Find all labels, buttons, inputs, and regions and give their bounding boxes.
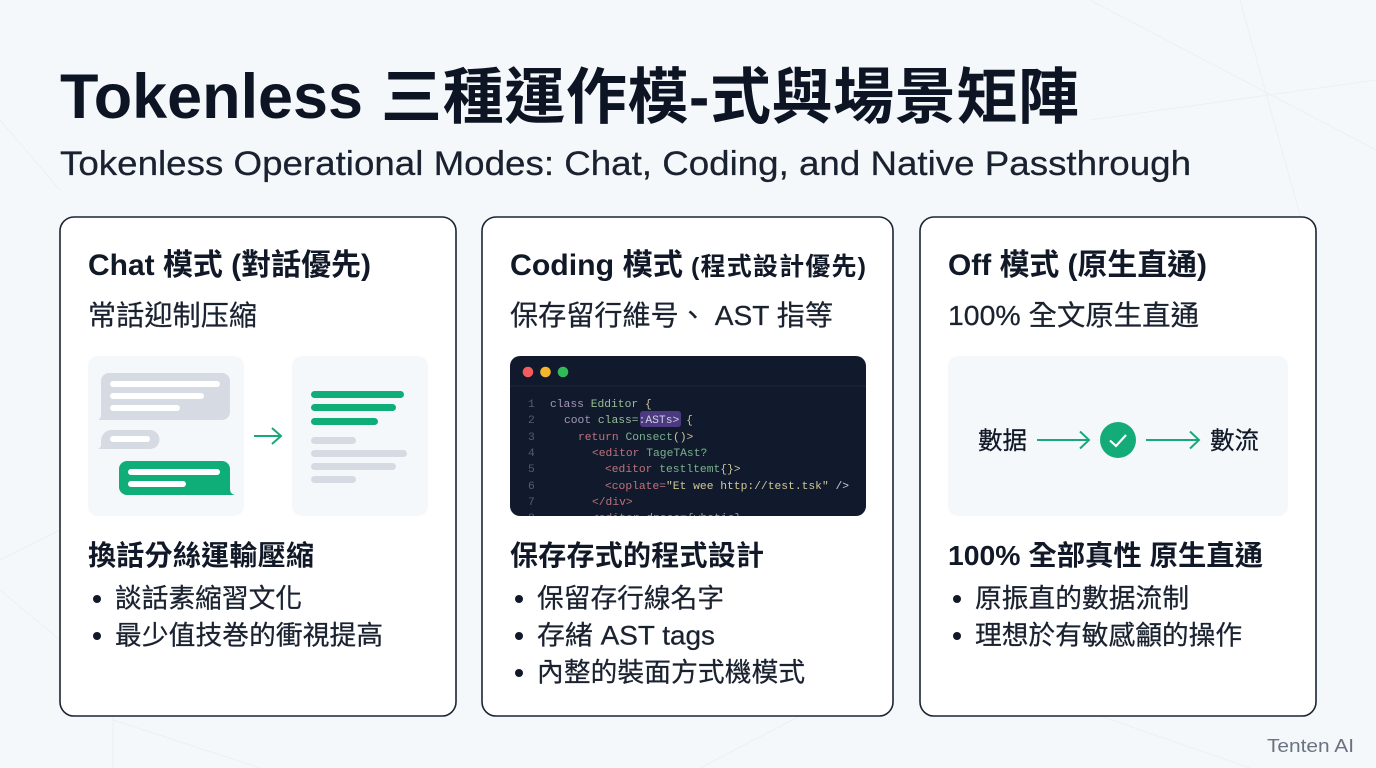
- coding subheading: 保存留行維号、 AST 指等: [510, 300, 833, 331]
- coding section title: 保存存式的程式設計: [510, 540, 764, 571]
- subtitle: Tokenless Operational Modes: Chat, Coding, and Native Passthrough: [60, 145, 1191, 183]
- illustration: code editor: <editor dpose={whatio}: [592, 513, 741, 525]
- illustration: code editor: 3: [528, 432, 535, 444]
- chat bullets: [93, 584, 383, 650]
- coding heading: [510, 249, 866, 282]
- illustration: code editor: return Consect()>: [578, 432, 693, 444]
- off bullets: [953, 584, 1242, 650]
- chat section title: 換話分絲運輸壓縮: [88, 540, 314, 571]
- chat subheading: 常話迎制压縮: [88, 300, 257, 331]
- coding bullets: [515, 584, 805, 688]
- illustration: code editor: 5: [528, 464, 535, 476]
- title: [60, 62, 1079, 132]
- illustration: code editor: <editor testltemt{}>: [605, 464, 741, 476]
- coding bullets: 存緒 AST tags: [537, 620, 715, 650]
- illustration: code editor: 1: [528, 399, 535, 411]
- illustration: chat compression: [88, 356, 428, 516]
- off bullets: 原振直的數据流制: [975, 584, 1189, 614]
- chat heading: Chat 模式 (對話優先): [88, 249, 371, 282]
- chat bullets: 談話素縮習文化: [115, 584, 302, 614]
- illustration: code editor: 8: [528, 513, 535, 525]
- panel: coding mode: [482, 217, 893, 716]
- off subheading: 100% 全文原生直通: [948, 300, 1199, 331]
- coding bullets: 內整的裝面方式機模式: [537, 658, 805, 688]
- title: Tokenless: [60, 62, 363, 132]
- illustration: passthrough flow: 數据: [978, 427, 1027, 455]
- illustration: passthrough flow: [948, 356, 1288, 516]
- illustration: code editor: <coplate="Et wee http://test.tsk" />: [605, 481, 849, 493]
- footer brand: Tenten AI: [1267, 736, 1354, 756]
- illustration: code editor: </div>: [592, 497, 633, 509]
- illustration: code editor: coot class=:ASTs> {: [564, 415, 693, 427]
- panel: off mode: [920, 217, 1316, 716]
- illustration: code editor: 6: [528, 481, 535, 493]
- coding heading: Coding 模式: [510, 249, 683, 282]
- panel: chat mode: [60, 217, 456, 716]
- illustration: code editor: 2: [528, 415, 535, 427]
- illustration: code editor: 7: [528, 497, 535, 509]
- off bullets: 理想於有敏感龥的操作: [975, 620, 1242, 650]
- coding bullets: 保留存行線名字: [537, 584, 724, 614]
- illustration: code editor: <editor TageTAst?: [592, 448, 707, 460]
- illustration: code editor: [510, 356, 866, 525]
- illustration: code editor: class Edditor {: [550, 399, 652, 411]
- title: 三種運作模-式與場景矩陣: [381, 63, 1079, 131]
- off heading: Off 模式 (原生直通): [948, 249, 1207, 282]
- illustration: code editor: 4: [528, 448, 535, 460]
- illustration: passthrough flow: 數流: [1210, 427, 1259, 455]
- off section title: 100% 全部真性 原生直通: [948, 540, 1263, 571]
- chat bullets: 最少值技巻的衝視提高: [115, 620, 383, 650]
- coding heading: (程式設計優先): [691, 253, 866, 281]
